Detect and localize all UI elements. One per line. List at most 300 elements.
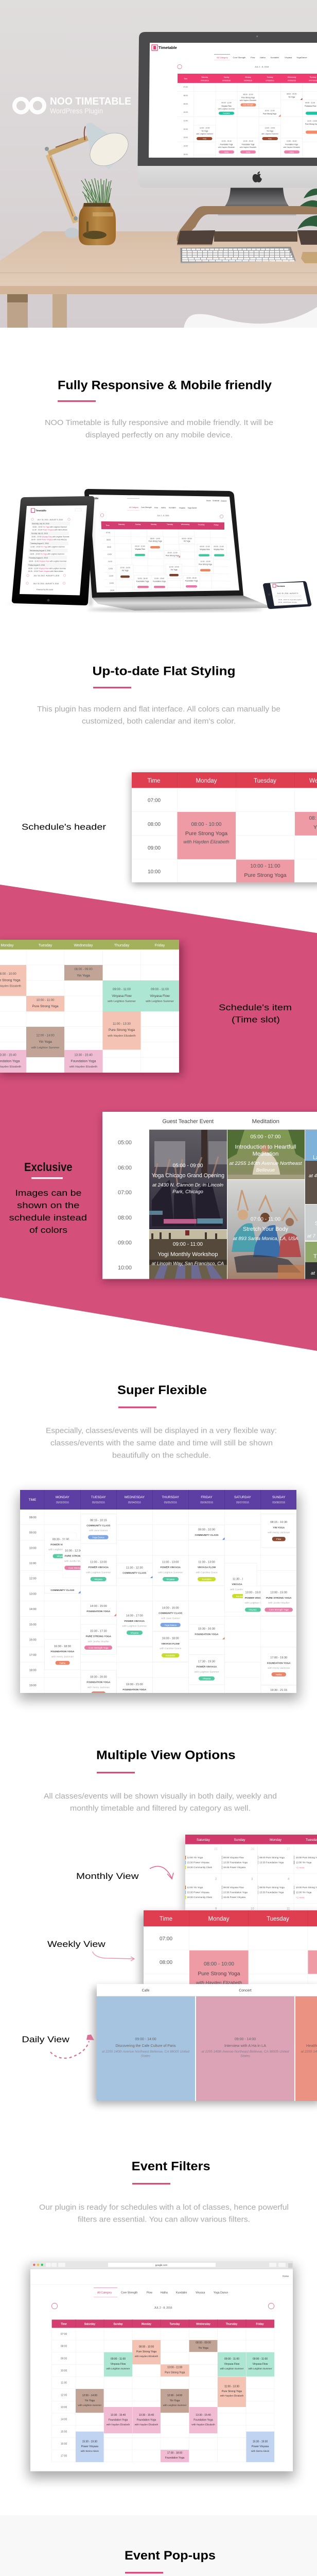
time axis	[183, 86, 188, 156]
image slot: heartfull meditation: at 2255 140th Avenue Northeast	[230, 1161, 302, 1166]
panel: phone: Timetable	[276, 585, 285, 587]
tablet screen: list view: 12:00 - 14:00 Yin Yoga with Leighton Summer	[30, 546, 65, 548]
slot: wednesday partial	[295, 812, 317, 836]
events: first week: 15:30 Power Vinyasa	[187, 1861, 209, 1863]
slot: tuesday 10:00: 10:00 - 11:00	[37, 999, 55, 1002]
text: flat styling description	[37, 705, 280, 725]
slots: mint: 09:00 - 11:00	[111, 2358, 126, 2361]
slot: pure strong yoga tuesday	[236, 860, 294, 883]
brand logo: NOO TIMETABLE	[50, 96, 131, 107]
time axis: 10:00	[29, 1547, 37, 1550]
image slot: stretch your body	[227, 1180, 305, 1279]
card: tue foundation yoga: 14:00 - 15:00	[90, 1605, 107, 1608]
time axis: 10:00	[183, 111, 188, 113]
slots: salmon: with Hayden Elizabeth	[135, 2355, 158, 2358]
laptop screen: timetable: Vinyasa Flow	[135, 548, 145, 550]
browser title bar: google.com	[155, 2264, 167, 2266]
slots: blue: with Sierra Alexis	[81, 2450, 99, 2452]
table header labels: WEDNESDAY	[125, 1496, 145, 1499]
icon: infinity	[14, 99, 44, 112]
schedule cards: 13:30 - 15:40	[287, 140, 297, 142]
table header labels: 05/08/2016	[272, 1501, 285, 1504]
laptop screen: timetable: 09:00 - 11:00	[214, 546, 224, 548]
time axis: 09:00	[29, 1532, 37, 1535]
image slot: yogi monthly workshop: Yogi Monthly Workshop	[157, 1251, 218, 1258]
heading: fully responsive: Fully Responsive & Mobile friendly	[58, 378, 272, 393]
time labels: 07:00	[148, 798, 161, 804]
slot: thursday vinyasa	[103, 980, 141, 1011]
slots: mint: with Leighton Summer	[107, 2367, 130, 2370]
date numbers: 3	[251, 1878, 253, 1881]
card: thu vinyasa flow: Kundalini	[166, 1654, 175, 1657]
card: fri community class	[188, 1525, 224, 1540]
card: fri power vinyasa: POWER VINYASA	[197, 1666, 217, 1668]
card: tue foundation yoga evening: FOUNDATION YOGA	[86, 1681, 111, 1684]
category tabs	[94, 2287, 228, 2297]
week navigation: JUL 2 - 8, 2016	[154, 2307, 172, 2310]
heading: multiple view options: Multiple View Options	[96, 1749, 236, 1762]
card: mon power vinyasa: 09:30 - 11:30	[52, 1538, 69, 1541]
table header: Sunday	[224, 76, 230, 78]
laptop screen: timetable: 10:00 - 11:00	[167, 552, 178, 554]
table header labels: MONDAY	[56, 1496, 69, 1499]
laptop screen: timetable: Kundalini	[169, 507, 176, 509]
schedule table: Wednesday	[196, 2323, 210, 2326]
laptop screen: timetable: 10:00	[108, 553, 112, 555]
panel: grey pop-up section	[0, 2515, 317, 2576]
card: sat vinyasa flow: VINYASA FLOW	[232, 1583, 250, 1586]
tablet screen: list view: JULY 30, 2016 - AUGUST 5, 2016	[33, 583, 59, 585]
laptop screen: timetable: 13:30 - 15:40	[154, 578, 164, 580]
heading underline	[132, 2183, 170, 2184]
time axis: 12:00	[29, 1578, 37, 1581]
table header: Monday	[245, 76, 251, 78]
schedule cards: with Leighton Summer	[196, 133, 214, 135]
tablet screen: list view	[26, 509, 81, 590]
card: thu power vinyasa	[153, 1561, 188, 1581]
card: tue foundation yoga evening: with Henry Jackman	[87, 1686, 110, 1689]
category tabs: Hatha	[161, 2291, 168, 2294]
tablet screen: list view: 15:30 - 19:30 Power Vinyasa with Sierra Alexis	[28, 570, 63, 572]
laptop screen: timetable: Vinyasa Flow	[214, 548, 224, 550]
schedule table: 09:00	[61, 2357, 67, 2360]
panel: phone	[263, 581, 311, 609]
slots: mint: Vinyasa Flow	[224, 2363, 240, 2366]
laptop screen: timetable: 11:00	[108, 561, 112, 563]
card: sun foundation yoga: with Henry Jackman	[268, 1667, 290, 1670]
time labels	[148, 798, 161, 875]
card: sat power vinyasa: Vinyasa	[249, 1608, 257, 1611]
card: sun foundation yoga: Hatha	[276, 1673, 282, 1676]
image slot: heartfull meditation: Meditation	[253, 1151, 278, 1157]
card: wed power vinyasa	[117, 1601, 152, 1647]
card: mon foundation yoga: Hatha	[60, 1662, 66, 1664]
time axis: 13:00	[29, 1592, 37, 1596]
text: responsive description: NOO Timetable is fully responsive and mobile friendly. It will be	[45, 418, 273, 427]
table header: Wednesday	[288, 76, 296, 78]
panel: weekly view: 08:00	[160, 1960, 172, 1965]
panel: weekly view	[140, 1910, 317, 1988]
time axis: 15:00	[29, 1623, 37, 1626]
card: sun foundation yoga: FOUNDATION YOGA	[267, 1662, 291, 1664]
slot: friday vinyasa	[141, 980, 179, 1011]
schedule cards: Hatha	[224, 151, 228, 153]
panel: weekly view: Tuesday	[267, 1916, 289, 1922]
schedule table: Tuesday	[170, 2323, 180, 2326]
events: first week: 19:45 Power Vinyasa	[223, 1866, 245, 1869]
laptop screen: timetable: 13:30 - 15:40	[137, 578, 148, 580]
table header: Saturday	[201, 76, 208, 78]
events: first week: 12:00 Yin Yoga	[296, 1861, 312, 1863]
tablet screen: list view: 09:00 - 11:00 Vinyasa Flow with Leighton Summer	[29, 561, 67, 563]
slot: cafe: 09:00 - 14:00	[135, 2038, 156, 2041]
label: schedule's item: Schedule's item	[219, 1003, 292, 1012]
laptop screen: timetable: Hatha	[161, 507, 166, 509]
slots: mint: Vinyasa Flow	[253, 2363, 268, 2366]
slot: wednesday 08:00: 08:00 - 09:00	[74, 968, 93, 971]
slots: mint: Vinyasa Flow	[111, 2363, 126, 2366]
brand logo	[14, 96, 131, 115]
card: fri vinyasa flow	[189, 1561, 224, 1581]
category tabs: Core Strength	[233, 56, 245, 59]
table header labels: SUNDAY	[272, 1496, 285, 1499]
card: tue power vinyasa: with Leighton Summer	[86, 1571, 111, 1574]
heading underline	[58, 400, 96, 402]
table header labels	[29, 1496, 285, 1504]
table header labels: Time	[147, 778, 161, 784]
schedule table	[52, 2319, 274, 2462]
month header labels	[197, 1838, 317, 1842]
category tabs: Core Strength	[121, 2291, 137, 2294]
time labels: 10:00	[148, 869, 161, 875]
schedule cards: 13:30 - 15:40	[221, 140, 232, 142]
slot: cafe	[97, 1996, 195, 2101]
slot: concert: 09:00 - 14:00	[235, 2038, 256, 2041]
schedule cards: Hatha	[289, 151, 294, 153]
events: first week: +2 more	[296, 1866, 305, 1869]
text: flexible description	[46, 1427, 277, 1460]
laptop screen: timetable: All Category	[129, 506, 138, 509]
table header	[178, 74, 317, 83]
heading underline	[118, 1406, 156, 1408]
schedule cards: 13:30 - 15:40	[243, 140, 253, 142]
laptop screen: timetable: Tuesday	[167, 523, 173, 526]
image slot: yoga chicago: Park, Chicago	[172, 1189, 203, 1195]
table header labels: 05/04/2016	[128, 1501, 141, 1504]
card: mon power vinyasa: Vinyasa	[57, 1555, 65, 1557]
text: flat styling description: customized, both calendar and item's color.	[82, 717, 236, 725]
slot: pure strong yoga tuesday: Pure Strong Yoga	[244, 872, 287, 878]
schedule cards: 12:00 - 14:00	[265, 127, 275, 129]
schedule table: 17:00	[61, 2455, 67, 2458]
schedule cards: with Hayden Elizabeth	[240, 146, 256, 148]
tablet screen: list view: 09:00 - 11:00 Vinyasa Flow with Leighton Summer	[28, 568, 66, 570]
image slot: yoga chicago: 05:00 - 09:00	[173, 1163, 203, 1169]
card: thu power vinyasa: with Leighton Summer	[158, 1571, 183, 1574]
arrow: weekly view	[93, 1952, 134, 1961]
slot: monday foundation	[0, 1050, 26, 1073]
text: multiple view description: monthly timetable and filtered by category as well.	[70, 1804, 251, 1813]
slot: cafe: States	[141, 2055, 151, 2058]
slot: monday 08:00	[0, 965, 26, 996]
table header: 07/07/2016	[309, 79, 317, 81]
laptop screen: timetable: 08:00 - 09:00	[182, 538, 192, 540]
slot: wednesday partial: 08:	[309, 816, 316, 821]
column headings	[163, 1118, 279, 1125]
laptop screen: timetable: 09:00 - 11:00	[135, 545, 145, 547]
card: fri vinyasa flow: VINYASA FLOW	[198, 1566, 216, 1569]
panel: image schedule	[102, 1112, 317, 1282]
card: mon power vinyasa: with Leighton Summer	[48, 1548, 73, 1551]
time axis	[118, 1140, 132, 1271]
time labels: 09:00	[148, 845, 161, 851]
slot: thursday pure strong	[103, 1011, 141, 1050]
slots: brown: Yin Yoga	[198, 2347, 208, 2350]
tablet screen: list view: JULY 30, 2016 - AUGUST 5, 2016	[37, 519, 63, 521]
schedule table: Sunday	[113, 2323, 123, 2326]
slot: tuesday 10:00: Pure Strong Yoga	[32, 1005, 59, 1008]
schedule table: 08:00	[61, 2345, 67, 2348]
table header labels: Tuesday	[39, 944, 52, 947]
table header labels: 05/03/2016	[92, 1501, 105, 1504]
card: wed foundation yoga evening	[117, 1677, 152, 1696]
slots: pink: 17:00 - 18:00	[167, 2451, 182, 2454]
schedule table: 16:00	[61, 2443, 67, 2446]
card: mon pure strong: PURE STRONG YOGA	[65, 1555, 91, 1557]
slot: health partial: Health	[306, 2043, 317, 2048]
category tabs: Yoga Dance	[214, 2291, 228, 2294]
card: thu vinyasa flow: VINYASA FLOW	[162, 1642, 180, 1645]
schedule cards: Pure Strong Yoga	[241, 97, 255, 99]
category tabs: Vinyasa	[196, 2291, 205, 2294]
schedule cards	[193, 92, 317, 159]
slot: wednesday 08:00	[64, 965, 103, 980]
time axis: 10:00	[118, 1265, 132, 1271]
table header labels: 05/05/2016	[164, 1501, 177, 1504]
slots: blue: 15:30 - 19:30	[82, 2440, 97, 2443]
panel: phone: JULY 30, 2016 - AUGUST 5	[277, 592, 298, 595]
keyboard	[180, 247, 296, 263]
card: sun yin yoga	[261, 1514, 296, 1548]
card: fri community class: COMMUNITY CLASS	[195, 1534, 219, 1536]
card: sat power vinyasa	[243, 1586, 270, 1616]
time axis: 16:00	[29, 1638, 37, 1641]
time axis: 06:00	[118, 1165, 132, 1171]
panel: monthly view	[183, 1835, 317, 1912]
time axis: 09:00	[118, 1240, 132, 1246]
text: flexible description: beautifully on the schedule.	[112, 1451, 211, 1460]
text: filters description	[39, 2203, 289, 2224]
panel: hero desk scene	[0, 0, 317, 328]
tablet screen: list view: 18:00 - 19:00 Yin Yoga with Leighton Summer	[32, 526, 67, 528]
schedule cards: 09:00 - 11:00	[305, 102, 315, 104]
card: wed power vinyasa: 14:00 - 17:00	[126, 1615, 143, 1618]
slot: wednesday 08:00: Yin Yoga	[77, 974, 90, 978]
table header labels: Thursday	[114, 944, 130, 947]
card: wed power vinyasa: Vinyasa	[131, 1632, 139, 1634]
slots: brown: Yin Yoga	[85, 2399, 95, 2402]
schedule cards: with Leighton Summer	[261, 133, 279, 135]
card: thu community class: Yoga Dance	[164, 1624, 177, 1626]
slots: salmon	[132, 2340, 246, 2407]
events: second week: 13:30 Foundation Yoga	[259, 1891, 284, 1893]
iMac monitor	[138, 32, 317, 216]
slot: tuesday 10:00	[26, 996, 64, 1011]
panel: weekly view: 07:00	[160, 1936, 172, 1942]
image slots: partial right column	[305, 1130, 317, 1279]
card: sun pure strong: 13:00 - 15:00	[270, 1591, 287, 1595]
table header labels: Monday	[196, 778, 217, 784]
tablet screen: list view: Thursday August 4, 2016	[29, 557, 48, 559]
image slot: stretch your body: 07:00 - 11:00	[251, 1216, 281, 1222]
date numbers: 26	[251, 1848, 254, 1851]
desk	[0, 231, 317, 328]
table header labels: TIME	[29, 1498, 36, 1502]
schedule cards: Yin Yoga	[288, 96, 295, 98]
panel: phone: 18:00 - 19:00 Yin Yoga with Leighton	[278, 599, 302, 601]
slot: tuesday yin yoga	[26, 1027, 64, 1057]
laptop screen: timetable: 13:00	[109, 575, 113, 577]
laptop screen: timetable: Home	[206, 500, 211, 502]
card: mon community class	[44, 1586, 80, 1594]
events: first week: 13:30 Foundation Yoga	[223, 1861, 248, 1863]
slot: wednesday partial: Y	[313, 824, 317, 831]
table header: 07/04/2016	[244, 79, 252, 81]
label: schedule's item: (Time slot)	[232, 1015, 280, 1024]
category tabs: Kundalini	[176, 2291, 187, 2294]
card: fri vinyasa flow: Kundalini	[202, 1578, 212, 1581]
schedule cards: with Hayden Elizabeth	[218, 146, 235, 148]
table header labels: SATURDAY	[234, 1496, 251, 1499]
table header labels: 05/02/2016	[56, 1501, 69, 1504]
panel: weekly view: Time	[160, 1916, 172, 1922]
table header: 07/02/2016	[201, 79, 209, 81]
panel: purple weekly schedule	[19, 1490, 300, 1700]
image slot: stretch your body: at 893 Santa Monica, LA, USA	[233, 1236, 298, 1242]
schedule cards: with Hayden Elizabeth	[283, 146, 300, 148]
schedule cards: Yin Yoga	[267, 130, 273, 132]
desk lamp	[45, 123, 134, 238]
label: monthly view: Monthly View	[76, 1871, 139, 1881]
card: thu community class: with Jane Garner	[161, 1617, 180, 1620]
laptop screen: timetable: Monday	[151, 523, 157, 526]
monitor stand	[218, 188, 296, 216]
card: fri power vinyasa	[188, 1654, 224, 1685]
image slot: heartfull meditation	[227, 1130, 305, 1179]
date numbers: 4	[288, 1878, 290, 1881]
panel: laptop	[84, 489, 268, 612]
events: second week: 19:45 Power Vinyasa	[223, 1896, 245, 1899]
time axis: 15:00	[183, 154, 188, 156]
slot: thursday pure strong: 11:00 - 13:30	[113, 1023, 131, 1026]
time axis: 09:00	[183, 103, 188, 105]
card: fri power vinyasa: 17:30 - 19:30	[198, 1660, 215, 1663]
card: mon pure strong: with Jenifer Mueller	[64, 1560, 86, 1563]
category tabs	[178, 54, 307, 69]
image slot: heartfull meditation: Bellevue	[256, 1167, 275, 1173]
date numbers: 10	[251, 1907, 254, 1910]
panel: browser with filtered schedule	[28, 2261, 295, 2478]
laptop screen: timetable: Pure Strong Yoga	[199, 564, 212, 566]
table header labels: FRIDAY	[201, 1496, 213, 1499]
time axis: 11:00	[29, 1562, 36, 1565]
schedule table: Time	[61, 2323, 67, 2326]
time labels: 08:00	[148, 822, 161, 827]
month header labels: Saturday	[197, 1838, 210, 1842]
text: multiple view description	[44, 1792, 277, 1813]
laptop screen: timetable: Yin Yoga	[171, 569, 178, 571]
slot: thursday vinyasa: 09:00 - 11:00	[113, 988, 131, 991]
laptop screen: timetable: Classes	[221, 500, 227, 502]
card: sun yin yoga: Flow	[276, 1538, 281, 1540]
slot: pure strong yoga monday	[177, 812, 236, 859]
events: second week: 15:30 Power Vinyasa	[187, 1891, 209, 1893]
slots: blue: Power Vinyasa	[252, 2445, 269, 2448]
card: thu community class: 14:00 - 16:00	[162, 1606, 179, 1609]
text: filters description: filters are essential. You can allow various filters.	[78, 2215, 250, 2224]
laptop screen: timetable: Vinyasa Flow	[200, 548, 210, 550]
card: mon pure strong: Core Strength Yoga	[68, 1567, 89, 1569]
card: wed power vinyasa: POWER VINYASA	[125, 1620, 145, 1622]
time axis: 18:00	[29, 1669, 37, 1672]
panel: weekly view: Monday	[208, 1916, 230, 1922]
table header: 07/06/2016	[288, 79, 296, 81]
card: sun pure strong: with Jenifer Mueller	[268, 1602, 290, 1605]
table header labels: 05/06/2016	[200, 1501, 213, 1504]
card: sun pure strong: Core Strength Yoga	[269, 1608, 289, 1611]
slots: mint: with Leighton Summer	[249, 2367, 272, 2370]
day columns header: Cafe	[142, 1989, 149, 1993]
card: sat power vinyasa: POWER VINYASA	[245, 1597, 266, 1599]
table header labels: Wednesday	[74, 944, 93, 947]
card: tue pure strong: Core Strength Yoga	[89, 1647, 109, 1649]
slot: pure strong yoga monday: with Hayden Elizabeth	[183, 839, 230, 844]
slot: wednesday foundation: 13:30 - 15:40	[74, 1054, 93, 1057]
schedule cards: 08:00 - 09:00	[287, 93, 297, 95]
laptop screen: timetable: ble	[95, 497, 98, 500]
slots: pink: Foundation Yoga	[137, 2418, 156, 2421]
events: first week	[185, 1856, 317, 1869]
schedule cards: Pure Strong Yoga	[263, 113, 276, 115]
category tabs: All Category	[97, 2291, 112, 2294]
card: mon foundation yoga: FOUNDATION YOGA	[50, 1650, 75, 1653]
slots: salmon: Pure Strong Yoga	[165, 2371, 185, 2374]
timetable logo: Timetable	[158, 46, 177, 50]
events: first week: 08:00 Pure Strong Yoga	[259, 1856, 285, 1859]
card: tue community class	[81, 1514, 116, 1544]
table header: Tuesday	[267, 76, 273, 78]
slots: salmon: 08:00 - 10:00	[139, 2345, 154, 2348]
slot: cafe: at 2255 140th Avenue Northeast Bellevue, CA 98005 United	[102, 2050, 189, 2054]
events: first week: 09:00 Vinyasa Flow	[223, 1856, 244, 1859]
schedule table: 15:00	[61, 2430, 67, 2433]
slots: pink	[104, 2407, 217, 2462]
laptop screen: timetable: 08:00	[107, 539, 111, 541]
tablet screen: list view: Powered by the cause	[37, 588, 53, 590]
slots: pink: with Hayden Elizabeth	[191, 2423, 215, 2426]
image slot: yogi monthly workshop: at Lincoln Way, San Francisco, CA	[152, 1261, 224, 1266]
time axis: 11:00	[184, 120, 188, 122]
panel: phone: 19:00 - 20:00 Power Vinyasa	[278, 601, 297, 603]
laptop screen: timetable: Saturday	[118, 523, 125, 526]
card: fri community class: 09:00 - 10:00	[198, 1529, 215, 1532]
card: sun foundation yoga	[261, 1647, 296, 1685]
slot: cafe: Discovering the Cafe Culture of Paris	[115, 2043, 176, 2048]
date numbers: 9	[215, 1907, 217, 1910]
laptop screen: timetable: Thursday	[198, 523, 205, 526]
card: sun bottom: 19:30 - 21:15	[270, 1689, 287, 1692]
card: sun pure strong	[261, 1586, 296, 1616]
